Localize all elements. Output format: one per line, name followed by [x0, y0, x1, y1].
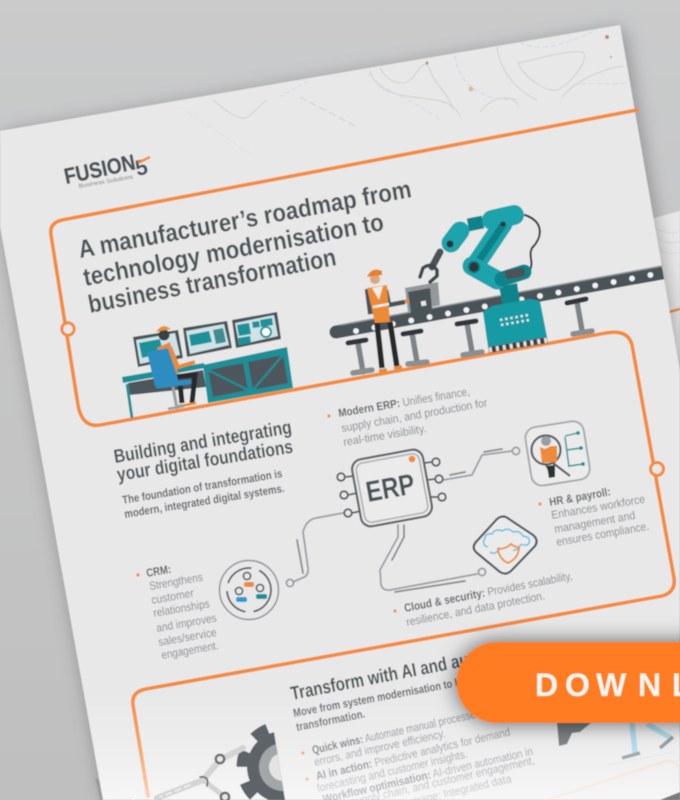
text: CRM	[136, 564, 220, 662]
icon: cloud security	[474, 516, 537, 574]
text: Modern ERP: supply chain, and production for	[340, 397, 488, 435]
section heading: digital foundations: The foundation of transformation is	[121, 468, 283, 507]
text: Modern ERP	[327, 386, 488, 449]
section heading: digital foundations: your digital foundations	[115, 437, 295, 486]
illustration: control room operator	[122, 312, 293, 418]
text: transform bullet list: Quick wins: Automate manual processes, reduce	[311, 701, 514, 757]
road behind sheet	[95, 778, 160, 800]
text: CRM: sales/service	[157, 627, 218, 649]
factory worker	[367, 269, 409, 371]
contour map decoration	[180, 28, 626, 153]
section heading: transform with AI: Move from system modernisation to business	[292, 670, 496, 720]
section heading: transform with AI: transformation.	[295, 708, 366, 734]
robot arm	[420, 215, 548, 353]
text: CRM: and improves	[155, 613, 218, 635]
conveyor legs	[348, 299, 592, 373]
node: right connector	[650, 462, 664, 476]
text: HR and payroll	[538, 486, 650, 549]
title	[76, 175, 414, 319]
diagram: ERP connectors	[286, 447, 520, 592]
text: transform bullet list: errors, and improve efficiency.	[313, 728, 446, 769]
text: transform bullet list: AI in action: Predictive analytics for demand	[315, 726, 512, 783]
text: HR and payroll: HR & payroll:	[548, 486, 612, 509]
node: left connector	[62, 323, 74, 335]
bottom fade over sheet	[98, 702, 680, 800]
text: CRM: CRM:	[145, 564, 172, 580]
diagram: ERP chip	[337, 448, 446, 528]
text: Cloud and security: Cloud & security: Provides scalability,	[403, 571, 573, 615]
text: Modern ERP: Modern ERP: Unifies finance,	[338, 386, 471, 420]
icon: CRM cycle	[220, 560, 278, 620]
section heading: digital foundations: modern, integrated digital systems.	[124, 483, 285, 521]
control desk	[122, 347, 293, 418]
title: A manufacturer’s roadmap from	[76, 175, 414, 264]
text: Cloud and security	[393, 571, 573, 629]
conveyor belt	[330, 266, 663, 338]
text: HR and payroll: Enhances workforce	[550, 494, 646, 522]
download button	[457, 642, 680, 723]
text: CRM: engagement.	[160, 640, 220, 662]
text: CRM: Strengthens	[148, 572, 204, 593]
text: Cloud and security: resilience, and data protection.	[405, 590, 546, 629]
logo: Fusion5: Business Solutions	[78, 174, 134, 190]
text: CRM: customer	[150, 588, 195, 607]
text: HR and payroll: ensures compliance.	[555, 521, 650, 549]
monitors	[133, 312, 281, 367]
logo: Fusion5: FUSION	[62, 149, 137, 189]
box on conveyor	[405, 282, 440, 313]
illustration: AI gear and robot arm	[132, 724, 286, 800]
text: Modern ERP: real-time visibility.	[342, 423, 427, 449]
diagram: ERP chip: ERP	[363, 468, 417, 509]
second sheet behind	[650, 211, 680, 380]
icon: HR magnifier	[524, 420, 591, 487]
text: CRM: relationships	[152, 598, 211, 620]
section heading: transform with AI: Transform with AI and automation	[289, 638, 533, 705]
illustration: conveyor and robot	[330, 215, 663, 373]
title: technology modernisation to	[81, 208, 386, 292]
text: transform bullet list	[301, 701, 536, 800]
orange frame: header and section 2	[51, 110, 674, 796]
text: transform bullet list: forecasting and customer insights.	[316, 749, 469, 795]
section heading: digital foundations: Building and integrating	[112, 417, 293, 468]
section heading: digital foundations	[112, 417, 295, 521]
title: business transformation	[86, 243, 339, 319]
text: HR and payroll: management and	[553, 510, 636, 536]
section heading: transform with AI	[289, 638, 533, 734]
bottom-right sheet corner	[660, 792, 680, 800]
operator and chair	[147, 326, 196, 409]
illustration: person walking behind button	[547, 722, 678, 800]
logo: Fusion5: 5	[133, 154, 150, 181]
